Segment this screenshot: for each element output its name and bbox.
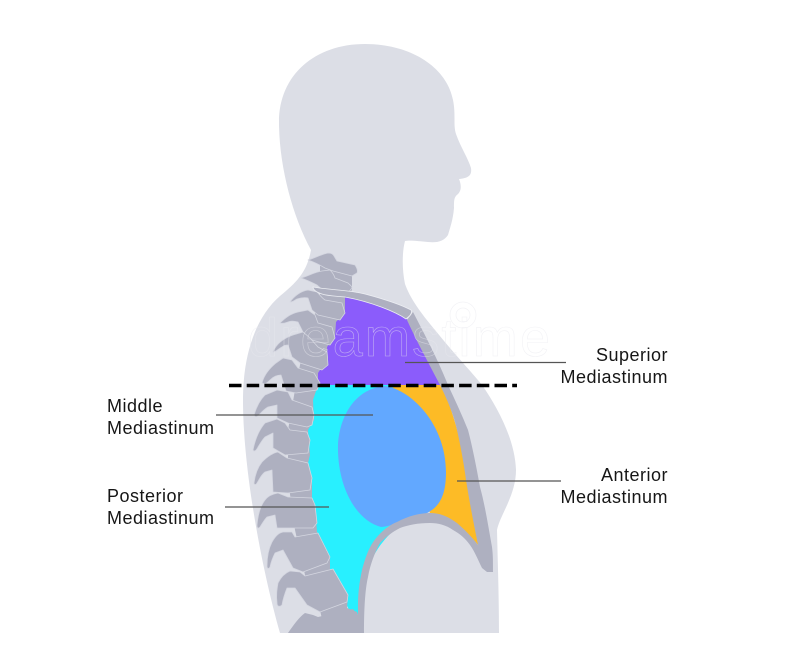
spine xyxy=(253,253,412,633)
label: posterior mediastinum: Posterior xyxy=(107,486,184,506)
vertebra 10 xyxy=(257,493,317,528)
vertebra 8 xyxy=(253,419,310,455)
spinal column backing xyxy=(288,262,364,633)
label: anterior mediastinum: Mediastinum xyxy=(560,487,668,507)
label: superior mediastinum: Superior xyxy=(596,345,668,365)
vertebra 1 xyxy=(308,253,357,276)
vertebra 9 xyxy=(254,452,312,493)
vertebra 3 xyxy=(290,290,345,320)
body silhouette xyxy=(243,44,516,633)
region: superior mediastinum xyxy=(310,296,441,386)
label: posterior mediastinum: Mediastinum xyxy=(107,508,215,528)
vertebra 5 xyxy=(273,332,328,370)
dashed boundary line xyxy=(229,384,517,387)
vertebra 6 xyxy=(262,358,320,393)
label: superior mediastinum: Mediastinum xyxy=(560,367,668,387)
diaphragm band xyxy=(358,513,487,633)
label: anterior mediastinum: Anterior xyxy=(601,465,668,485)
vertebra 4 xyxy=(280,310,335,345)
vertebra 13 xyxy=(288,609,363,633)
region: anterior mediastinum xyxy=(392,385,479,546)
leader line: middle xyxy=(216,414,373,416)
region: posterior mediastinum xyxy=(304,385,420,615)
watermark spiral xyxy=(450,302,476,328)
vertebra 7 xyxy=(254,390,314,427)
leader line: superior xyxy=(405,362,566,364)
watermark word: dreamstime xyxy=(248,308,552,368)
watermark xyxy=(248,302,552,368)
leader line: anterior xyxy=(457,480,561,482)
clavicle xyxy=(313,287,412,319)
label: middle mediastinum: Mediastinum xyxy=(107,418,215,438)
label: middle mediastinum: Middle xyxy=(107,396,163,416)
vertebra 2 xyxy=(301,270,352,294)
region: middle mediastinum xyxy=(338,386,446,527)
vertebra 11 xyxy=(267,532,330,572)
leader line: posterior xyxy=(225,506,329,508)
sternum and chest wall band xyxy=(407,312,493,572)
vertebra 12 xyxy=(277,569,348,612)
